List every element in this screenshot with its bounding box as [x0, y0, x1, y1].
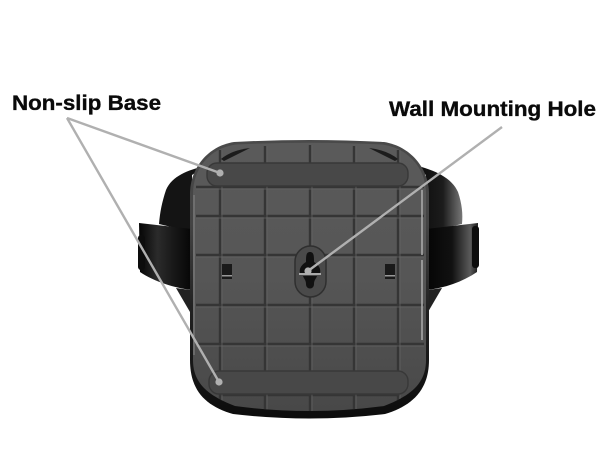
label: Non-slip Base: Non-slip Base: [12, 92, 161, 115]
icon: right side arm: [426, 223, 479, 312]
label: Wall Mounting Hole: Wall Mounting Hole: [389, 98, 596, 121]
icon: left upper ear of cradle: [159, 166, 205, 232]
icon: keyhole wall mounting hole: [295, 246, 326, 297]
plate face: [193, 143, 426, 411]
infographic: wall mount base diagram: [13, 94, 596, 418]
arrow: non-slip base leader to bottom pad: [67, 118, 223, 386]
left edge line: [193, 195, 195, 355]
icon: left clip slot: [222, 264, 232, 279]
outer rim: [190, 140, 429, 418]
icon: right clip slot: [385, 264, 395, 279]
rib grid: [196, 145, 424, 411]
right highlight edge: [421, 190, 423, 340]
icon: left side arm: [138, 223, 192, 312]
arrow: non-slip base leader to top pad: [67, 118, 224, 177]
bottom non-slip pad: [209, 371, 408, 394]
top corner shadows: [221, 148, 250, 161]
panel: base plate: [190, 140, 429, 418]
arrow: wall mounting hole leader: [304, 127, 502, 275]
top non-slip pad: [207, 163, 408, 186]
icon: right upper ear of cradle: [414, 165, 462, 232]
